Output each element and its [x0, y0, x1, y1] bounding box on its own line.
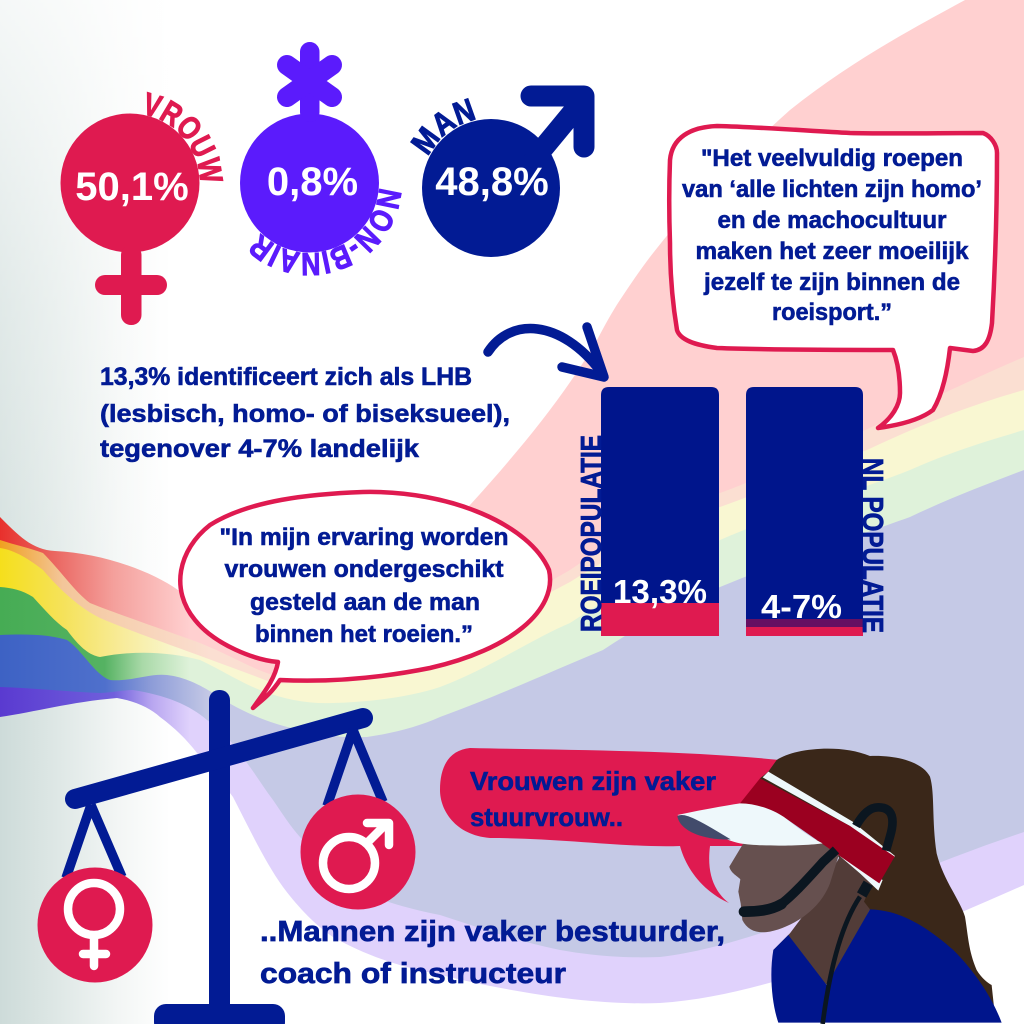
- quote bubble: machocultuur: roeisport.”: [772, 299, 892, 326]
- bar chart: LHB aandeel: NL POPULATIE: [856, 458, 888, 633]
- quote bubble: ondergeschikt: [180, 492, 550, 708]
- quote bubble: machocultuur: [669, 126, 997, 428]
- quote bubble: machocultuur: en de machocultuur: [718, 207, 946, 234]
- quote bubble: ondergeschikt: gesteld aan de man: [250, 589, 480, 616]
- quote bubble: machocultuur: "Het veelvuldig roepen: [701, 145, 963, 172]
- quote bubble: ondergeschikt: "In mijn ervaring worden: [220, 524, 508, 551]
- red speech bubble: stuurvrouw: stuurvrouw..: [470, 802, 623, 832]
- quote bubble: ondergeschikt: vrouwen ondergeschikt: [224, 556, 504, 583]
- bar chart: LHB aandeel: [576, 387, 888, 636]
- red speech bubble: stuurvrouw: [440, 748, 780, 903]
- caption: bestuurder: coach of instructeur: [260, 958, 566, 990]
- caption: bestuurder: ..Mannen zijn vaker bestuurder,: [260, 916, 725, 948]
- illustration: rower with cap and headset: [677, 749, 1002, 1024]
- arrow to bars: [488, 327, 604, 377]
- gender symbol: vrouw 50,1%: 50,1%: [75, 165, 189, 209]
- LHB statement text: (lesbisch, homo- of biseksueel),: [100, 400, 510, 428]
- LHB statement text: 13,3% identificeert zich als LHB: [100, 363, 472, 391]
- bar chart: LHB aandeel: 13,3%: [613, 573, 707, 610]
- quote bubble: machocultuur: jezelf te zijn binnen de: [703, 269, 960, 296]
- caption: bestuurder: [260, 916, 725, 990]
- quote bubble: ondergeschikt: binnen het roeien.”: [255, 621, 473, 648]
- red speech bubble: stuurvrouw: Vrouwen zijn vaker: [470, 766, 716, 796]
- bar chart: LHB aandeel: ROEIPOPULATIE: [576, 435, 608, 632]
- icon: female pan: [38, 868, 152, 982]
- bar chart: LHB aandeel: 4-7%: [761, 588, 842, 625]
- gender symbol: vrouw 50,1%: VROUW: [146, 92, 224, 182]
- icon: male pan: [300, 794, 416, 910]
- balance scale: [38, 690, 416, 1024]
- gender symbol: non-binair 0,8%: 0,8%: [267, 160, 358, 204]
- LHB statement text: [100, 363, 510, 463]
- gender symbol: vrouw 50,1%: [60, 92, 224, 325]
- quote bubble: machocultuur: maken het zeer moeilijk: [696, 238, 969, 265]
- gender symbol: non-binair 0,8%: NON-BINAIR: [250, 188, 402, 276]
- gender symbol: non-binair 0,8%: [240, 42, 402, 276]
- LHB statement text: tegenover 4-7% landelijk: [100, 435, 419, 463]
- gender symbol: man 48,8%: 48,8%: [435, 160, 549, 204]
- gender symbol: man 48,8%: [410, 86, 594, 257]
- quote bubble: machocultuur: van ‘alle lichten zijn homo’: [682, 176, 982, 203]
- gender symbol: man 48,8%: MAN: [410, 98, 476, 156]
